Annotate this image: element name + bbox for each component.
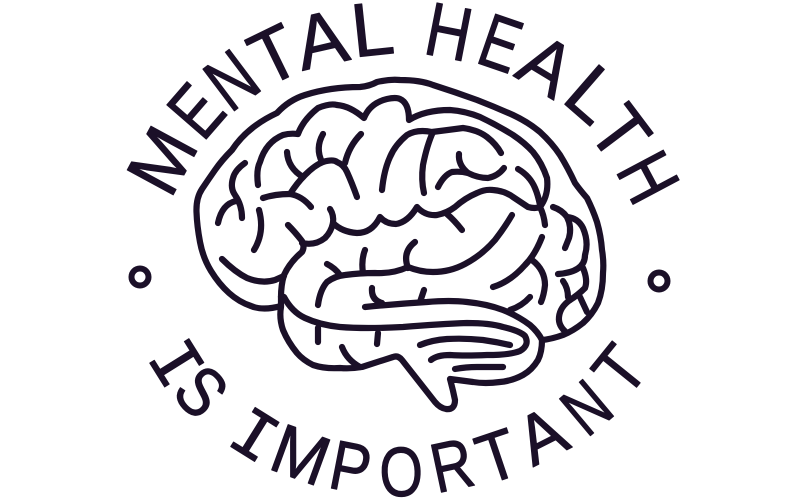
heading: IS IMPORTANT: T: [578, 331, 663, 410]
heading: MENTAL HEALTH: L: [549, 49, 637, 141]
temporal inner line: [284, 297, 527, 360]
central folds: [382, 128, 501, 190]
heading: MENTAL HEALTH: E: [469, 0, 532, 90]
icon: right dot: [650, 272, 668, 290]
heading: MENTAL HEALTH: M: [110, 113, 214, 208]
heading: MENTAL HEALTH: T: [573, 89, 667, 176]
frontal folds: [302, 209, 333, 244]
heading: IS IMPORTANT: T: [467, 414, 528, 500]
heading: IS IMPORTANT: A: [505, 391, 580, 481]
icon: brain: [196, 80, 603, 409]
left folds: [232, 163, 245, 218]
heading: IS IMPORTANT: M: [261, 409, 340, 500]
upper contour: [257, 98, 547, 225]
heading: MENTAL HEALTH: A: [504, 17, 590, 115]
temporal inner strokes: [420, 339, 510, 345]
icon: left dot: [132, 268, 148, 286]
heading: MENTAL HEALTH: H: [600, 138, 696, 217]
central fold: [281, 225, 304, 297]
heading: IS IMPORTANT: N: [547, 365, 627, 451]
temporal upper line: [318, 215, 512, 305]
heading: MENTAL HEALTH: E: [152, 68, 242, 154]
heading: IS IMPORTANT: I: [128, 327, 217, 404]
heading: MENTAL HEALTH: N: [189, 34, 275, 127]
heading: MENTAL HEALTH: T: [236, 7, 313, 103]
rear folds: [553, 207, 570, 248]
heading: IS IMPORTANT: I: [213, 395, 291, 484]
temporal lobe outline: [280, 297, 542, 409]
heading: MENTAL HEALTH: [110, 0, 696, 217]
heading: IS IMPORTANT: S: [159, 350, 244, 433]
brain outer outline: [196, 80, 603, 340]
heading: IS IMPORTANT: [128, 327, 663, 500]
